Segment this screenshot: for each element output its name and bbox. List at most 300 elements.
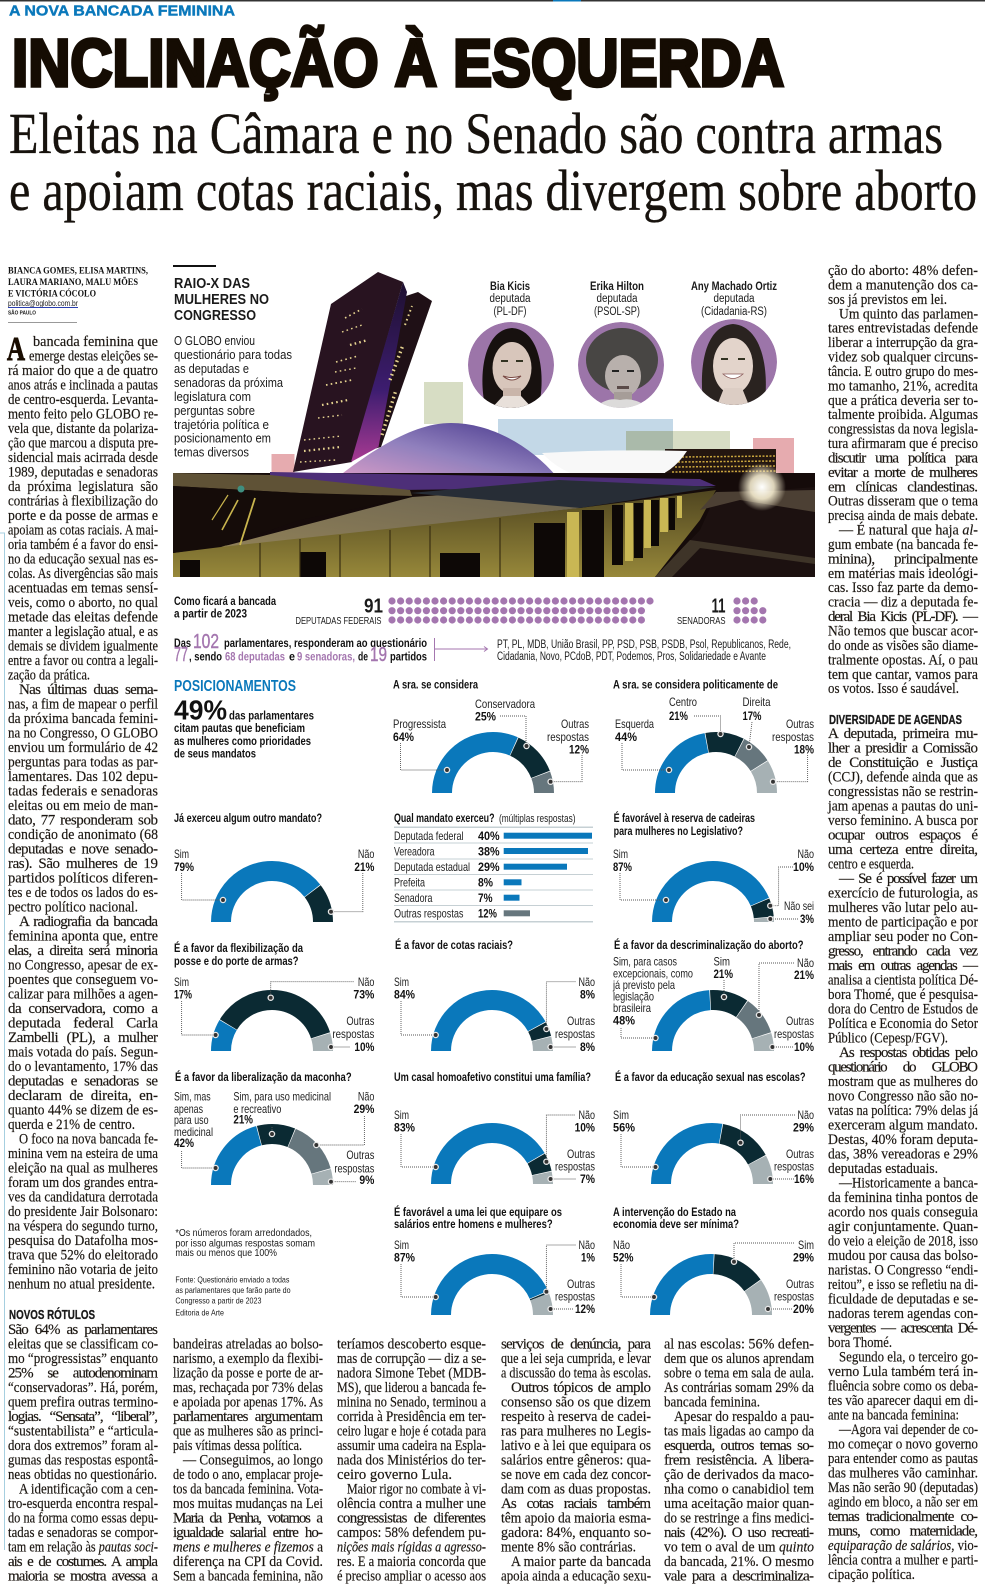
article column 6 upper: discutir uma política para xyxy=(828,450,978,466)
chart: qual mandato exerceu bar chart: Prefeita xyxy=(394,876,425,890)
article column 1 upper: oria também é a favor do ensi- xyxy=(8,537,158,553)
senators count: SENADORAS xyxy=(677,616,726,627)
intro text: senadoras da próxima xyxy=(174,376,283,390)
chart: liberalização da maconha: É a favor da liberalização da maconha? xyxy=(175,1071,352,1084)
article column 5: frem resistência. A libera- xyxy=(664,1452,814,1468)
footnotes: mais ou menos que 100% xyxy=(175,1248,277,1259)
chart: já exerceu outro mandato: 79% xyxy=(174,860,194,874)
responders sentence xyxy=(174,631,427,666)
chart: a sra. se considera: Conservadora xyxy=(475,697,535,711)
chart: intervenção do estado: A intervenção do Estado na xyxy=(613,1207,736,1219)
article column 5: uma aceitação maior quan- xyxy=(664,1496,814,1512)
article column 1 upper: na véspera do segundo turno, xyxy=(8,1218,158,1234)
article column 1 upper: mais votada do país. Segun- xyxy=(8,1044,158,1060)
composition heading xyxy=(174,596,276,620)
article column 6 lower: questionário do GLOBO xyxy=(828,1060,978,1076)
article column 2: tos da bancada feminina. Vota- xyxy=(173,1482,323,1498)
article column 1 lower: eleitas que se classificam co- xyxy=(8,1336,158,1352)
article column 3: nada dos Ministérios do ter- xyxy=(337,1452,486,1468)
chart: flexibilização de armas: Sim xyxy=(174,975,189,989)
chart: liberalização da maconha: Sim, mas xyxy=(174,1090,211,1104)
article column 6 lower: ocupar outros espaços é xyxy=(828,828,978,844)
article column 1 upper: 1989, deputadas e senadoras xyxy=(8,464,158,480)
article column 6 lower: agir conjuntamente. Quan- xyxy=(828,1219,978,1235)
article column 2: igualdade salarial entre ho- xyxy=(173,1525,323,1541)
chart: intervenção do estado: Não xyxy=(613,1238,630,1252)
intro text: O GLOBO enviou xyxy=(174,334,255,348)
article column 1 upper: perguntas para todas as par- xyxy=(8,754,158,770)
article column 1 lower: “sustentabilista” e “articula- xyxy=(8,1424,158,1440)
chart: qual mandato exerceu bar chart xyxy=(394,813,593,922)
chart: equiparação salarial: 87% xyxy=(394,1250,415,1264)
article column 6 lower: Público (Cepesp/FGV). xyxy=(828,1030,948,1046)
chart: intervenção do estado: 20% xyxy=(793,1302,814,1316)
chart: qual mandato exerceu bar chart: Deputada federal xyxy=(394,829,464,843)
chart: equiparação salarial xyxy=(394,1206,595,1316)
chart: reserva de cadeiras: 10% xyxy=(793,860,814,874)
chart: flexibilização de armas: 17% xyxy=(174,988,192,1002)
article column 6 lower: uma certeza entre direita, xyxy=(828,842,978,858)
article column 5: al nas escolas: 56% defen- xyxy=(664,1336,814,1352)
chart: politicamente de: 44% xyxy=(615,730,637,744)
article column 6 lower: temas tradicionalmente co- xyxy=(828,1509,978,1525)
chart: a sra. se considera: 12% xyxy=(569,742,589,756)
chart: educação sexual: Não xyxy=(798,1108,814,1122)
responders sentence: 19 xyxy=(370,644,387,666)
article column 3: nições mais rígidas a agresso- xyxy=(337,1540,486,1556)
chart: qual mandato exerceu bar chart: 40% xyxy=(478,829,500,843)
article column 3: res. E a maioria concorda que xyxy=(337,1554,486,1570)
article column 2: mas, rechaçada por 73% delas xyxy=(173,1380,323,1396)
article column 3: olência contra a mulher une xyxy=(337,1496,486,1512)
article column 6 lower: vergentes — acrescenta Dé- xyxy=(828,1320,978,1336)
senators count xyxy=(677,596,763,627)
chart: equiparação salarial: Sim xyxy=(394,1238,409,1252)
chart: a sra. se considera: 25% xyxy=(475,710,496,724)
panel: bench composition xyxy=(174,596,791,666)
drop cap: A xyxy=(7,331,25,368)
chart: reserva de cadeiras: 3% xyxy=(800,912,814,926)
article column 5: nha como o canabidiol tem xyxy=(664,1482,814,1498)
portrait names: Bia Kicis xyxy=(490,281,530,293)
chart: liberalização da maconha: 29% xyxy=(354,1102,375,1116)
byline: politica@oglobo.com.br xyxy=(8,299,78,308)
article column 5: As contrárias somam 29% da xyxy=(664,1380,814,1396)
chart: politicamente de: 21% xyxy=(669,709,688,723)
article column 1 upper: contrárias à flexibilização do xyxy=(8,494,158,510)
chart: cotas raciais: 84% xyxy=(394,988,415,1002)
article column 1 upper: foram um dos grandes entra- xyxy=(8,1175,158,1191)
article column 1 upper: no Congresso, apesar de ex- xyxy=(8,958,158,974)
portrait: Erika Hilton xyxy=(578,322,664,412)
chart: intervenção do estado: respostas xyxy=(774,1290,814,1304)
responders sentence: partidos xyxy=(390,652,427,664)
portrait names: Any Machado Ortiz xyxy=(691,281,777,293)
chart: descriminalização do aborto: brasileira xyxy=(613,1001,651,1015)
chart: politicamente de: Outras xyxy=(786,717,814,731)
byline: E VICTÓRIA CÓCOLO xyxy=(8,288,96,298)
chart: descriminalização do aborto: É a favor da descriminalização do aborto? xyxy=(614,939,804,952)
deputies count: 91 xyxy=(364,596,383,618)
chart: intervenção do estado: economia deve ser mínima? xyxy=(613,1219,739,1231)
big stat: das parlamentares xyxy=(229,710,314,722)
chart: descriminalização do aborto: respostas xyxy=(774,1027,814,1041)
intro text: temas diversos xyxy=(174,446,249,460)
article column 1 upper: pectro político nacional. xyxy=(8,900,138,916)
article column 3: corrida à Presidência em ter- xyxy=(337,1409,486,1425)
panel heading: CONGRESSO xyxy=(174,308,256,324)
article column 6 lower: A deputada, primeira mu- xyxy=(828,726,978,742)
section heading: POSICIONAMENTOS xyxy=(174,678,296,695)
article column 6 upper: minina), principalmente xyxy=(828,551,978,567)
chart: já exerceu outro mandato: Já exerceu algum outro mandato? xyxy=(174,813,322,825)
article column 2: Maria da Penha, votamos a xyxy=(173,1510,323,1526)
article column 1 upper: tes e de todos os lados do es- xyxy=(8,885,158,901)
article column 6 lower: — Se é possível fazer um xyxy=(838,871,978,887)
article column 6 lower: centro e esquerda. xyxy=(828,856,914,872)
article column 1 upper: minina vem na esteira de uma xyxy=(8,1146,158,1162)
chart: reserva de cadeiras xyxy=(613,812,814,926)
panel heading: RAIO-X DAS xyxy=(174,276,250,292)
portrait names xyxy=(490,281,777,318)
chart: politicamente de: respostas xyxy=(772,730,814,744)
chart: intervenção do estado: Outras xyxy=(786,1277,814,1291)
article column 4: que a lei seja cumprida, e levar xyxy=(501,1351,651,1367)
chart: já exerceu outro mandato: 21% xyxy=(354,860,375,874)
portrait names: (PL-DF) xyxy=(494,306,527,318)
responders sentence: , sendo xyxy=(189,652,222,664)
article column 4: salários entre gêneros: qua- xyxy=(501,1452,651,1468)
article column 1 upper: da próxima bancada femini- xyxy=(8,711,158,727)
chart: equiparação salarial: É favorável a uma lei que equipare os xyxy=(394,1206,562,1219)
chart: qual mandato exerceu bar chart: 8% xyxy=(478,876,493,890)
article column 6 upper: em clínicas clandestinas. xyxy=(828,479,978,495)
chart: a sra. se considera: Progressista xyxy=(393,717,446,731)
arrow to party list xyxy=(434,638,488,661)
panel: raio-x intro xyxy=(173,265,292,460)
article column 1 lower: ais e de costumes. A ampla xyxy=(8,1554,158,1570)
chart: qual mandato exerceu bar chart: 12% xyxy=(478,906,497,920)
article column 1 upper: de centro-esquerda. Levanta- xyxy=(8,392,158,408)
chart: politicamente de xyxy=(613,680,814,793)
chart: reserva de cadeiras: Não xyxy=(798,847,814,861)
article column 1 upper: zação da prática. xyxy=(8,668,90,684)
article column 1 upper: tadas federais e senadoras xyxy=(8,784,158,800)
responders sentence: parlamentares, responderam ao questionário xyxy=(224,638,427,650)
chart: cotas raciais: É a favor de cotas raciais? xyxy=(395,939,513,952)
chart: liberalização da maconha: respostas xyxy=(334,1161,374,1175)
chart: qual mandato exerceu bar chart: Vereadora xyxy=(394,844,435,858)
photo: national congress at night xyxy=(173,272,815,577)
article column 1 upper: da próxima legislatura são xyxy=(8,479,158,495)
article column 1 upper: apoiam as cotas raciais. A mai- xyxy=(8,522,158,538)
article column 5: sobre o tema em sala de aula. xyxy=(664,1366,814,1382)
article column 3: campos: 58% defendem pu- xyxy=(337,1525,486,1541)
footnotes xyxy=(175,1228,315,1318)
article column 1 upper: querda e 21% de centro. xyxy=(8,1117,135,1133)
article column 2: de todo o ano, emplacar proje- xyxy=(173,1467,323,1483)
chart: já exerceu outro mandato xyxy=(174,813,375,922)
dome xyxy=(343,423,557,477)
article column 5: ção de derivados da maco- xyxy=(664,1467,814,1483)
chart: flexibilização de armas: posse e do porte de armas? xyxy=(174,956,298,968)
chart: descriminalização do aborto: 48% xyxy=(613,1014,635,1028)
article column 1 lower: tadas e senadoras se compor- xyxy=(8,1525,158,1541)
article column 1 lower: dora dos extremos” foram al- xyxy=(8,1438,158,1454)
article column 2: narismo, a exemplo da flexibi- xyxy=(173,1351,323,1367)
article column 3: é preciso ampliar o acesso aos xyxy=(337,1568,486,1584)
chart: casal homoafetivo: Outras xyxy=(567,1147,595,1161)
chart: a sra. se considera xyxy=(393,680,589,793)
article column 1 upper: calizar para milhões a agen- xyxy=(8,986,158,1002)
article column 5: tas mais ligadas ao campo da xyxy=(664,1424,814,1440)
bowl xyxy=(542,450,687,478)
article column 1 upper: sidencial mais acirrada desde xyxy=(8,450,158,466)
article column 1 upper: Zambelli (PL), a mulher xyxy=(8,1030,158,1046)
panel: posicionamentos xyxy=(174,678,314,760)
responders sentence: e xyxy=(289,652,295,664)
chart: casal homoafetivo: Um casal homoafetivo constitui uma família? xyxy=(394,1072,591,1084)
article column 5: vo tem o aval de um quinto xyxy=(664,1540,814,1556)
article column 1 upper: nas, a fim de mapear o perfil xyxy=(8,696,158,712)
article column 4: dam com as duas propostas. xyxy=(501,1482,651,1498)
article column 2: parlamentares argumentam xyxy=(173,1409,323,1425)
article column 4: ras para mulheres no Legis- xyxy=(501,1424,651,1440)
responders sentence: de xyxy=(358,652,368,664)
chart: politicamente de: 18% xyxy=(794,742,814,756)
article column 6 upper: os votos. Isso é saudável. xyxy=(828,681,959,697)
footnotes: Congresso a partir de 2023 xyxy=(175,1296,262,1306)
article column 1 upper: trava que 52% do eleitorado xyxy=(8,1248,158,1264)
chart: equiparação salarial: Não xyxy=(578,1238,595,1252)
article column 6 upper xyxy=(828,263,979,697)
composition heading: a partir de 2023 xyxy=(174,608,247,620)
article column 1 upper: enviou um formulário de 42 xyxy=(8,740,158,756)
article column 6 upper: dem a manutenção dos ca- xyxy=(828,277,978,293)
portrait names: (Cidadania-RS) xyxy=(701,306,767,318)
chart: descriminalização do aborto: Não xyxy=(797,956,814,970)
article column 1 upper: rá maior do que a de quatro xyxy=(8,363,158,379)
article column 1 upper: do o levantamento, 17% das xyxy=(8,1059,158,1075)
responders sentence: 9 senadoras, xyxy=(297,652,355,664)
chart: descriminalização do aborto: excepcionais, como xyxy=(613,966,693,980)
chart: liberalização da maconha: Sim, para uso medicinal xyxy=(233,1090,331,1104)
chart: equiparação salarial: 1% xyxy=(581,1250,595,1264)
article column 1 upper: veis, como o aborto, no qual xyxy=(8,595,158,611)
article column 1 upper: eleitas ou em meio de man- xyxy=(8,798,158,814)
responders sentence: 68 deputadas xyxy=(225,652,285,664)
article column 1 upper: lamentares. Das 102 depu- xyxy=(8,769,158,785)
chart: descriminalização do aborto: já previsto pela xyxy=(612,978,675,992)
article column 1 lower: A identificação com a cen- xyxy=(19,1482,158,1498)
article column 1 upper: deputada federal Carla xyxy=(8,1016,158,1032)
party list: PT, PL, MDB, União Brasil, PP, PSD, PSB, PSDB, Psol, Republicanos, Rede, xyxy=(497,639,791,651)
big stat xyxy=(174,694,314,760)
chart: a sra. se considera: Outras xyxy=(561,717,589,731)
chart: descriminalização do aborto: 21% xyxy=(714,967,733,981)
article column 5: esquerda, outros temas so- xyxy=(664,1438,814,1454)
footnotes: Fonte: Questionário enviado a todas xyxy=(175,1274,289,1284)
chart: casal homoafetivo: 83% xyxy=(394,1121,415,1135)
article column 1 upper: ras). São mulheres de 19 xyxy=(8,856,158,872)
article column 3: mas de corrupção — diz a se- xyxy=(337,1351,486,1367)
article column 1 lower: tro-esquerda encontra respal- xyxy=(8,1496,158,1512)
article column 1 lower: tam em relação às pautas soci- xyxy=(8,1540,158,1556)
article column 3 xyxy=(337,1336,486,1584)
article column 2: mos muitas mudanças na Lei xyxy=(173,1496,323,1512)
chart: politicamente de: 17% xyxy=(742,709,762,723)
chart: flexibilização de armas: 73% xyxy=(353,988,375,1002)
article column 6 lower: equiparação de salários, vio- xyxy=(828,1538,978,1554)
big stat: as mulheres como prioridades xyxy=(174,736,311,748)
article column 1 lower: quem prefira outras termino- xyxy=(8,1394,158,1410)
article column 1 upper: vela que, distante da polariza- xyxy=(8,421,158,437)
article column 3: minina no Senado, terminou a xyxy=(337,1394,486,1410)
article column 1 lower: maioria se mostra avessa a xyxy=(8,1568,158,1584)
byline: BIANCA GOMES, ELISA MARTINS, xyxy=(8,266,148,276)
intro text xyxy=(174,334,292,460)
article column 4: mente 8% são contrárias. xyxy=(501,1540,636,1556)
portrait names: deputada xyxy=(490,293,531,305)
chart: cotas raciais: 8% xyxy=(580,1040,595,1054)
article column 2: e apoiada por apenas 17%. As xyxy=(173,1394,323,1410)
article column 5 xyxy=(664,1336,814,1584)
chart: intervenção do estado xyxy=(613,1207,814,1316)
chart: qual mandato exerceu bar chart: 29% xyxy=(478,860,500,874)
chart: educação sexual xyxy=(613,1071,814,1186)
chart: já exerceu outro mandato: Sim xyxy=(174,847,189,861)
chart: liberalização da maconha: 42% xyxy=(174,1136,194,1150)
responders sentence: 102 xyxy=(193,631,219,653)
article column 4: gadora: 84%, enquanto so- xyxy=(501,1525,651,1541)
article column 3: nadora Simone Tebet (MDB- xyxy=(337,1366,486,1382)
article column 1 upper: eleição na qual as mulheres xyxy=(8,1160,158,1176)
building behind bowl xyxy=(665,449,776,478)
chart: casal homoafetivo: 10% xyxy=(575,1121,595,1135)
footnotes: Editoria de Arte xyxy=(175,1308,224,1318)
article column 1 upper: no da educação sexual nas es- xyxy=(8,552,158,568)
chart: cotas raciais: Sim xyxy=(394,975,409,989)
chart: flexibilização de armas xyxy=(174,942,375,1054)
footnotes: por isso algumas respostas somam xyxy=(175,1238,315,1250)
chart: reserva de cadeiras: Sim xyxy=(613,847,628,861)
article column 1 lower: neas obtidas no questionário. xyxy=(8,1467,157,1483)
article column 6 lower: cipação política. xyxy=(828,1567,915,1583)
article column 3: assumir uma cadeira na Espla- xyxy=(337,1438,486,1454)
big stat: 49% xyxy=(174,694,227,726)
chart: reserva de cadeiras: É favorável à reserva de cadeiras xyxy=(614,812,755,825)
portraits xyxy=(468,319,777,412)
article column 6 upper: — É natural que haja al- xyxy=(838,522,978,539)
article column 4: se nove em cada dez concor- xyxy=(501,1467,651,1483)
chart: descriminalização do aborto: Sim, para casos xyxy=(613,955,677,969)
chart: liberalização da maconha: 21% xyxy=(233,1112,253,1126)
chart: politicamente de: Direita xyxy=(742,695,771,709)
chart: flexibilização de armas: respostas xyxy=(332,1027,374,1041)
chart: cotas raciais: respostas xyxy=(555,1027,595,1041)
deputies count: DEPUTADAS FEDERAIS xyxy=(296,616,382,627)
chart: educação sexual: 56% xyxy=(613,1121,635,1135)
article column 2: lização da posse e porte de ar- xyxy=(173,1366,323,1382)
chart: qual mandato exerceu bar chart: 38% xyxy=(478,844,500,858)
chart: educação sexual: Sim xyxy=(613,1108,629,1122)
article column 1 lower: 25% se autodenominam xyxy=(8,1366,158,1382)
chart: liberalização da maconha: medicinal xyxy=(174,1125,213,1139)
big stat: citam pautas que beneficiam xyxy=(174,723,305,735)
article column 5: vale para a descriminaliza- xyxy=(664,1568,814,1584)
chart: intervenção do estado: 52% xyxy=(613,1250,634,1264)
chart: politicamente de: Esquerda xyxy=(615,717,654,731)
chart: a sra. se considera: respostas xyxy=(547,730,589,744)
chart: casal homoafetivo: 7% xyxy=(580,1172,595,1186)
subtitle xyxy=(9,101,977,223)
article column 3: teríamos descoberto esque- xyxy=(337,1336,486,1352)
big stat: de seus mandatos xyxy=(174,748,256,760)
intro text: questionário para todas xyxy=(174,348,292,362)
article column 6 lower: gresso, entrando cada vez xyxy=(828,944,978,960)
chart: qual mandato exerceu bar chart: Deputada estadual xyxy=(394,860,470,874)
composition heading: Como ficará a bancada xyxy=(174,596,276,608)
portrait: Any Machado Ortiz xyxy=(691,319,777,408)
chart: descriminalização do aborto: 21% xyxy=(794,968,814,982)
chart: liberalização da maconha: Outras xyxy=(346,1148,374,1162)
article column 1 upper: partidos políticos diferen- xyxy=(8,870,158,886)
party list xyxy=(497,639,791,663)
subheading: novos rótulos: NOVOS RÓTULOS xyxy=(9,1307,95,1322)
article column 1 upper: mento feito pelo GLOBO re- xyxy=(8,406,158,422)
chart: intervenção do estado: 29% xyxy=(793,1250,814,1264)
byline: LAURA MARIANO, MALU MÕES xyxy=(8,277,138,287)
article column 1 upper: nenhum no atual presidente. xyxy=(8,1276,155,1292)
intro text: legislatura com xyxy=(174,390,251,404)
article column 1 upper: deputadas e senadoras se xyxy=(8,1074,158,1090)
chart: liberalização da maconha: apenas xyxy=(174,1102,203,1116)
chart: qual mandato exerceu bar chart: Senadora xyxy=(394,891,433,905)
article column 1 upper: bancada feminina que xyxy=(33,334,158,350)
article column 6 upper: evitar a morte de mulheres xyxy=(828,465,978,481)
chart: educação sexual: 29% xyxy=(793,1121,814,1135)
panel heading xyxy=(174,276,269,324)
portrait names: (PSOL-SP) xyxy=(594,306,640,318)
article column 1 upper: acentuadas em temas sensí- xyxy=(8,580,158,596)
article column 5: nais (42%). O uso recreati- xyxy=(664,1525,814,1541)
article column 5: dem que os alunos aprendam xyxy=(664,1351,814,1367)
chart: liberalização da maconha: e recreativo xyxy=(233,1102,282,1116)
article column 4: respeito à reserva de cadei- xyxy=(501,1409,651,1425)
article column 3: ceiro governo Lula. xyxy=(337,1467,452,1483)
chart: descriminalização do aborto: 10% xyxy=(794,1040,814,1054)
party list: Cidadania, Novo, PCdoB, PDT, Podemos, Pros, Solidariedade e Avante xyxy=(497,651,766,663)
article column 1 upper: ção que marcou a disputa pre- xyxy=(8,436,158,452)
article column 2: — Conseguimos, ao longo xyxy=(182,1452,323,1468)
article column 1 upper: A radiografia da bancada xyxy=(19,914,158,930)
kicker: A NOVA BANCADA FEMININA xyxy=(9,4,236,20)
article column 4: A maior parte da bancada xyxy=(511,1554,651,1570)
article column 1 upper: dato, 77 responderam sob xyxy=(8,812,158,828)
article column 1 upper: metade das eleitas defende xyxy=(8,610,158,626)
chart: descriminalização do aborto: legislação xyxy=(613,990,654,1004)
article column 2: mens e mulheres e fizemos a xyxy=(173,1540,323,1556)
chart: flexibilização de armas: 10% xyxy=(354,1040,375,1054)
article column 1 upper: manter a legislação atual, e as xyxy=(8,624,158,640)
chart: politicamente de: A sra. se considera politicamente de xyxy=(613,680,778,692)
article column 4: a discussão do tema às escolas. xyxy=(501,1366,651,1382)
chart: descriminalização do aborto: Sim xyxy=(714,955,730,969)
article column 4: têm apoio da maioria esma- xyxy=(501,1510,651,1526)
chart: educação sexual: É a favor da educação sexual nas escolas? xyxy=(615,1071,806,1084)
chart: equiparação salarial: Outras xyxy=(567,1277,595,1291)
byline: SÃO PAULO xyxy=(8,310,37,316)
